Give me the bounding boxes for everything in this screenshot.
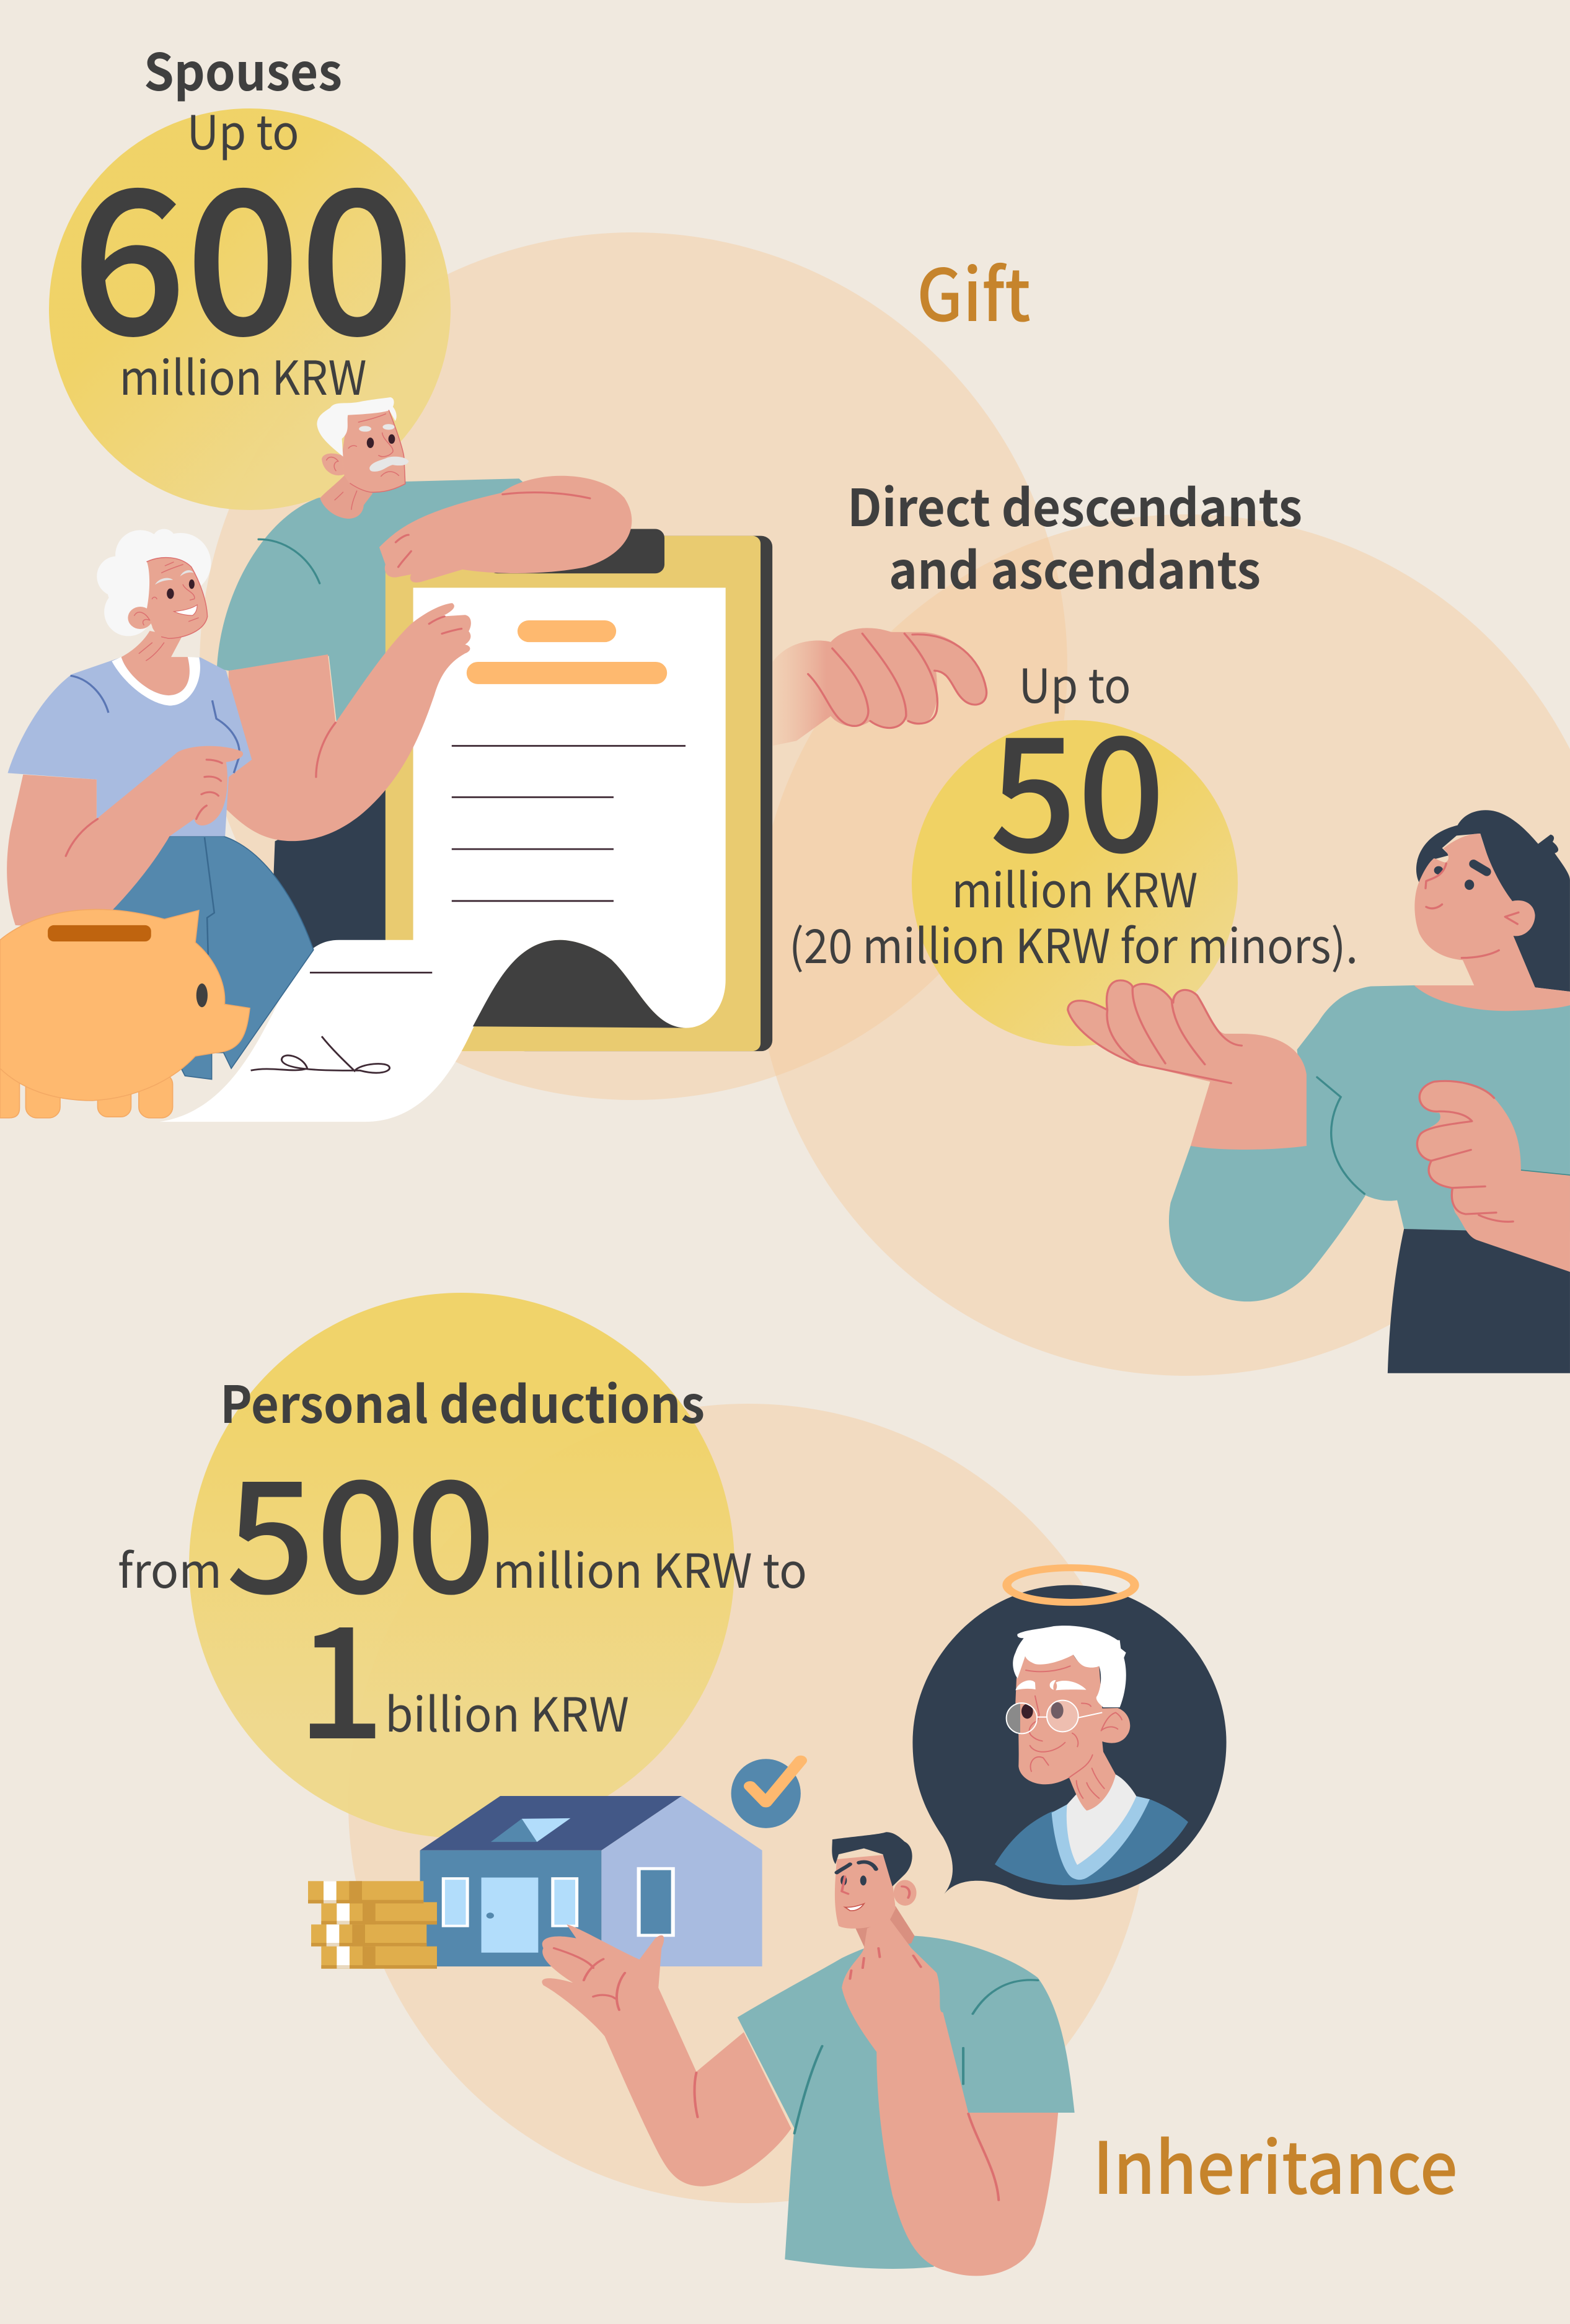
old man head — [317, 397, 408, 519]
number: 500: 500 — [226, 1413, 496, 1637]
arm crease — [316, 617, 462, 777]
woman torso — [1169, 985, 1570, 1301]
sweater — [995, 1799, 1188, 1885]
face lines — [1426, 863, 1519, 958]
text: million KRW and minors note: million KRW — [952, 853, 1197, 921]
hair — [97, 529, 211, 636]
ear — [128, 607, 152, 629]
old man legs — [273, 787, 386, 950]
face, neck and ear — [1015, 1655, 1130, 1811]
eyes — [1021, 1704, 1033, 1719]
circle: spouses highlight — [49, 108, 451, 510]
text: million KRW: million KRW — [119, 340, 367, 408]
heading: Direct descendants and ascendants — [847, 467, 1302, 604]
tinted lens — [1007, 1703, 1020, 1733]
arm creases — [395, 493, 590, 567]
right lens glare — [1047, 1701, 1078, 1732]
text: million KRW and minors note: (20 million KRW for minors). — [789, 909, 1358, 977]
heading: Personal deductions: Personal deductions — [220, 1364, 705, 1438]
shirt creases — [795, 1980, 1038, 2134]
number: 50: 50 — [989, 667, 1165, 897]
old man torso — [217, 478, 565, 723]
circle: descendants backdrop — [756, 514, 1570, 1376]
man neck — [855, 1906, 915, 1953]
neck — [121, 631, 190, 695]
grandfather portrait — [995, 1626, 1188, 1885]
circle: personal deductions highlight — [189, 1293, 734, 1838]
white shirt — [1067, 1774, 1136, 1865]
text: million KRW to: million KRW to — [493, 1533, 807, 1601]
heading: Direct descendants and ascendants: and ascendants — [889, 530, 1261, 604]
text: Up to: Up to — [1019, 648, 1131, 716]
man raised arm with hand — [542, 1924, 792, 2186]
circle: descendants highlight — [912, 720, 1238, 1046]
hand creases — [554, 1948, 698, 2117]
old man pointing arm — [226, 603, 471, 841]
hair — [1416, 810, 1570, 992]
number: 600: 600 — [72, 104, 414, 391]
arm creases — [66, 760, 222, 856]
face wrinkles — [1026, 1666, 1122, 1798]
text: Up to: Up to — [187, 95, 299, 163]
clipboard — [385, 529, 772, 1051]
old woman trousers — [103, 836, 314, 1080]
illustration: man imagining house and inheritance — [308, 1568, 1227, 2276]
circle: inheritance backdrop — [348, 1404, 1148, 2203]
old woman shirt — [7, 658, 252, 836]
eyes — [1465, 879, 1474, 890]
collar — [112, 657, 200, 706]
man head — [832, 1832, 917, 1929]
thought bubble with grandfather — [912, 1568, 1227, 1899]
face details — [135, 558, 208, 661]
piggy bank — [0, 910, 250, 1118]
glasses frame — [1007, 1701, 1102, 1733]
old woman head — [97, 529, 211, 706]
shirt crease — [258, 539, 320, 583]
text: billion KRW: billion KRW — [385, 1677, 629, 1745]
icon: check badge — [731, 1759, 801, 1828]
trouser seam — [205, 837, 214, 955]
old woman arm — [7, 746, 243, 930]
face — [146, 558, 208, 638]
number: 1: 1 — [297, 1559, 385, 1783]
heading: Direct descendants and ascendants: Direct descendants — [847, 467, 1302, 541]
sweater trim — [1052, 1796, 1150, 1880]
gold coin stacks — [308, 1881, 437, 1969]
hair — [1013, 1626, 1126, 1707]
man chin-pointing arm — [842, 1919, 1058, 2276]
illustration: elderly couple with clipboard and piggy bank — [0, 397, 772, 1122]
house — [420, 1796, 762, 1966]
man shirt — [738, 1936, 1075, 2269]
eyebrow — [1473, 864, 1487, 872]
woman head — [1414, 810, 1570, 1011]
section title: Inheritance: Inheritance — [1093, 2111, 1458, 2215]
arm creases — [850, 1948, 999, 2200]
holding hand — [1417, 1081, 1570, 1272]
section title: Gift: Gift — [917, 238, 1031, 342]
text: million KRW and minors note — [789, 853, 1358, 977]
paper text lines — [310, 746, 686, 972]
contract paper — [159, 588, 726, 1122]
hand passing clipboard — [773, 628, 987, 746]
sleeve creases — [1317, 1077, 1570, 1194]
illustration: woman with open palm and hand — [773, 628, 1570, 1373]
circle: gift backdrop — [200, 232, 1067, 1100]
signature — [251, 1036, 390, 1073]
old man resting arm — [379, 476, 632, 583]
text: from: from — [118, 1533, 222, 1601]
heading: Spouses: Spouses — [144, 32, 342, 105]
face and neck — [1414, 834, 1570, 1011]
halo — [1007, 1568, 1135, 1603]
eyebrows — [1015, 1680, 1087, 1690]
woman skirt — [1388, 1229, 1570, 1373]
paper shadow — [473, 940, 686, 1028]
bubble — [912, 1585, 1227, 1899]
paper heading bars — [467, 620, 667, 684]
shirt creases — [71, 676, 239, 773]
open palm — [1068, 980, 1307, 1150]
